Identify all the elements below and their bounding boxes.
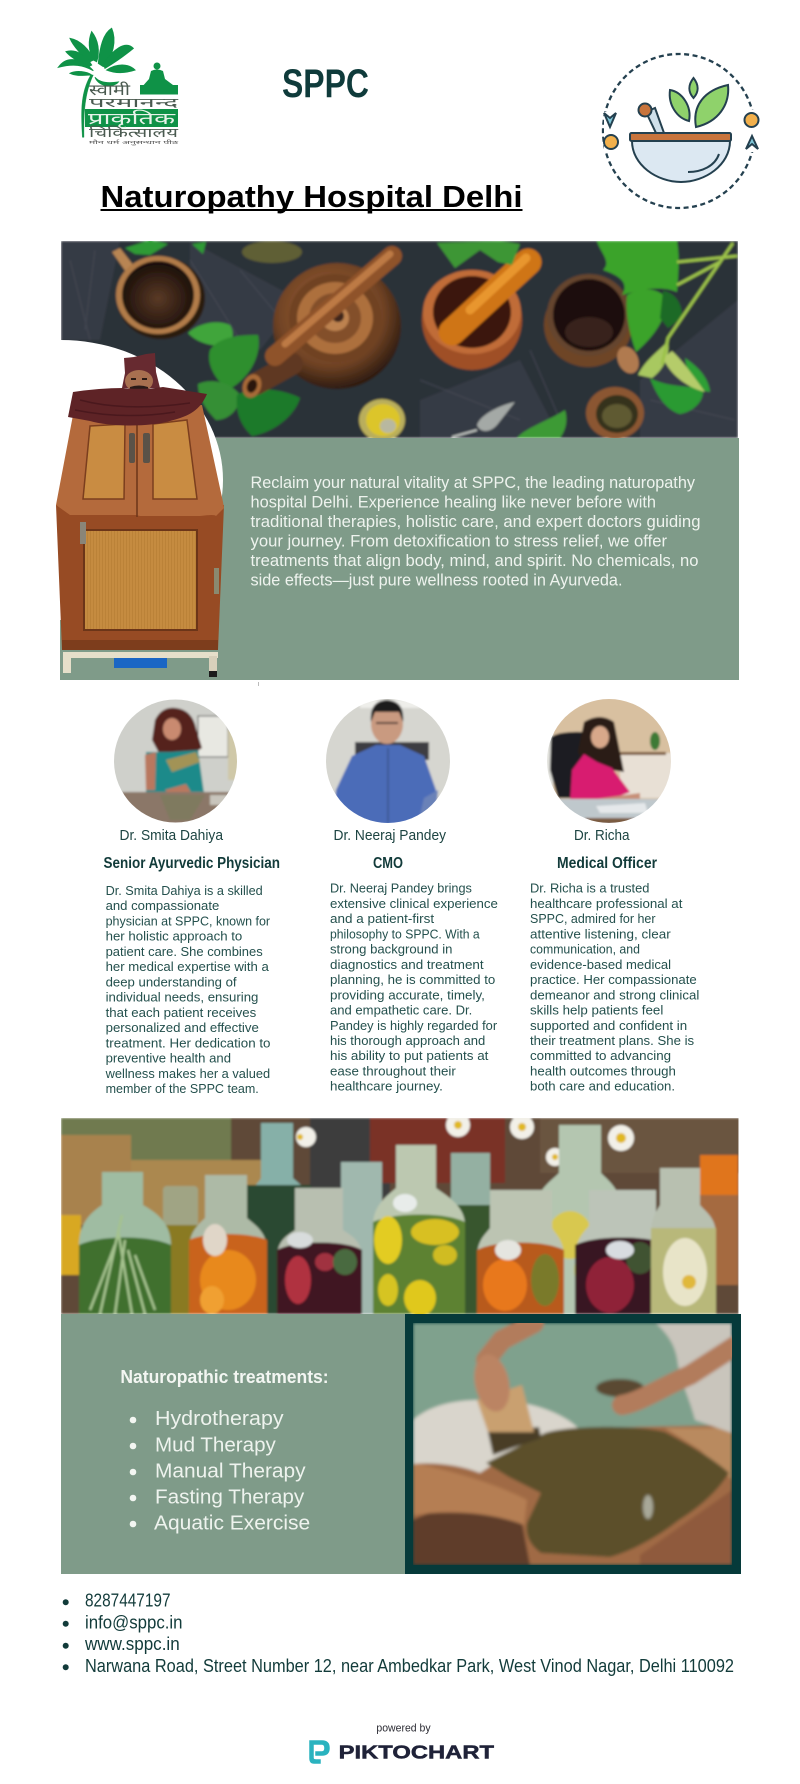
treatments list: Aquatic Exercise [154,1513,310,1535]
doctor bio: Richa: communication, and [530,942,640,957]
doctor bio: Neeraj: and empathetic care. Dr. [330,1002,472,1018]
daisies [296,1113,634,1166]
doctor role: Richa: Medical Officer [557,855,657,872]
treatments list [130,1408,310,1535]
powered by Piktochart footer: PIKTOCHART [339,1741,495,1762]
doctor bio: Neeraj: extensive clinical experience [330,896,498,911]
doctor bio: Smita: patient care. She combines [106,944,263,959]
green nettle leaves centre [188,322,233,346]
mortar and pestle [420,311,524,372]
logo wordmark: परमानन्द [89,95,180,110]
treatments list: Fasting Therapy [155,1487,304,1509]
orange bottle [188,1174,266,1241]
doctor bio: Neeraj: planning, he is committed to [330,972,495,987]
doctor name: Neeraj: Dr. Neeraj Pandey [334,827,446,844]
powered by Piktochart footer [310,1723,495,1763]
doctor bio: Richa: healthcare professional at [530,896,683,911]
cabinet base, legs and tray [114,656,167,668]
doctor name: Richa: Dr. Richa [574,827,630,844]
doctor bio: Smita: deep understanding of [106,974,237,989]
intro paragraph: side effects—just pure wellness rooted in Ayurveda. [250,570,622,590]
brand name: SPPC [282,62,369,106]
doctor bio: Richa: attentive listening, clear [530,926,671,941]
doctor bio: Smita: her medical expertise with a [106,959,270,974]
contact list: info@sppc.in [85,1612,182,1632]
doctor bio: Richa: evidence-based medical [530,957,671,972]
doctor bio: Smita: physician at SPPC, known for [106,914,271,928]
panel: intro green background [60,438,739,680]
doctor bio: Neeraj: ease throughout their [330,1064,456,1078]
doctor bio: Neeraj [330,881,498,1094]
bottles backdrop [61,1118,739,1314]
panel: treatments [61,1314,405,1574]
logo wordmark: स्वामी [89,82,131,99]
icon: Piktochart P mark [310,1741,329,1763]
red petal bottle [276,1186,360,1251]
clay cup left [112,248,134,272]
doctor bio: Richa [530,881,699,1094]
treatments list: Manual Therapy [155,1460,306,1482]
doctor bio: Smita: preventive health and [106,1050,231,1066]
doctor bio: Richa: skills help patients feel [530,1002,663,1018]
cabinet lower body [56,505,224,650]
doctor bio: Richa: health outcomes through [530,1064,676,1078]
doctor photo: Dr. Richa [545,695,675,826]
treatments list: Mud Therapy [155,1434,276,1456]
doctor photo: Dr. Smita Dahiya [114,700,237,822]
doctor bio: Richa: Dr. Richa is a trusted [530,881,649,896]
doctor role: Smita: Senior Ayurvedic Physician [104,855,280,872]
contact list: 8287447197 [85,1591,170,1611]
maroon shawl [68,387,207,426]
photo frame: mud therapy [405,1314,741,1574]
intro paragraph [250,473,700,590]
back bottles [255,1121,302,1187]
crimson bottle [576,1188,658,1246]
clay cup right [542,310,632,368]
doctor bio: Smita: treatment. Her dedication to [106,1035,270,1050]
doctor bio: Neeraj: Pandey is highly regarded for [330,1018,498,1033]
doctor bio: Smita: Dr. Smita Dahiya is a skilled [106,883,263,898]
doctor bio: Neeraj: Dr. Neeraj Pandey brings [330,881,472,896]
photo: mud applied to back [413,1323,735,1565]
contact list [63,1591,734,1676]
doctor bio: Smita: member of the SPPC team. [106,1081,259,1096]
steam cabinet with patient [56,353,224,677]
logo wordmark: चिकित्सालय [89,125,179,140]
logo: Swami Parmanand Prakritik Chikitsalaya [58,28,180,146]
green stems [662,243,737,365]
doctor bio: Smita [105,883,271,1096]
photo: herbal oil bottles [61,1113,740,1316]
turban and face [122,353,160,395]
doctor role: Neeraj: CMO [373,855,403,872]
treatments heading: Naturopathic treatments: [120,1367,329,1387]
hero photo: herbs and clay pots on slate [61,240,738,441]
rosemary bottle [77,1170,173,1246]
spoon and bottom leaf [477,402,515,431]
contact list: Narwana Road, Street Number 12, near Ambedkar Park, West Vinod Nagar, Delhi 110092 [85,1656,734,1676]
intro paragraph: your journey. From detoxification to stress relief, we offer [250,532,667,550]
teapot [273,263,401,389]
gold strainer [359,399,405,441]
doctor bio: Neeraj: providing accurate, timely, [330,987,485,1002]
intro paragraph: treatments that align body, mind, and spirit. No chemicals, no [250,551,698,570]
doctor bio: Smita: and compassionate [106,898,219,913]
doctor bio: Neeraj: diagnostics and treatment [330,957,484,972]
doctor bio: Smita: personalized and effective [106,1020,259,1035]
intro paragraph: hospital Delhi. Experience healing like never before with [250,492,656,512]
doctor name: Smita: Dr. Smita Dahiya [120,827,224,844]
doctor bio: Smita: that each patient receives [106,1005,257,1020]
logo wordmark: प्राकृतिक [88,110,176,129]
intro paragraph: traditional therapies, holistic care, and expert doctors guiding [250,512,700,531]
doctor bio: Richa: demeanor and strong clinical [530,987,699,1002]
doctor bio: Smita: individual needs, ensuring [106,990,258,1005]
doctor bio: Neeraj: and a patient-first [330,911,434,926]
right nettle leaves [597,241,679,295]
doctor bio: Richa: both care and education. [530,1079,675,1094]
doctor bio: Neeraj: his ability to put patients at [330,1048,489,1063]
logo wordmark: मौन धर्म अनुसन्धान पीठ [89,139,178,146]
doctor bio: Neeraj: healthcare journey. [330,1079,443,1094]
doctor bio: Richa: committed to advancing [530,1048,671,1063]
doctor bio: Smita: wellness makes her a valued [105,1066,270,1081]
orange bottle two [476,1188,564,1252]
daisy bottle [655,1166,717,1230]
top leaves [437,241,520,268]
logo yoga figure [140,62,178,94]
doctor bio: Richa: supported and confident in [530,1018,687,1033]
doctor bio: Neeraj: philosophy to SPPC. With a [330,926,480,941]
herbs top [242,241,302,263]
doctor bio: Richa: practice. Her compassionate [530,972,697,987]
yellow flower bottle [373,1143,466,1224]
small clay pot [586,387,644,439]
intro paragraph: Reclaim your natural vitality at SPPC, the leading naturopathy [250,473,695,492]
logo tree [58,28,135,137]
white arch behind steam cabinet [0,340,223,620]
icon: mortar, pestle and herbs in a dashed cycle [603,54,758,208]
doctor photo: Dr. Neeraj Pandey [326,699,450,823]
powered by Piktochart footer: powered by [376,1723,431,1735]
treatments list: Hydrotherapy [155,1408,284,1430]
doctor bio: Neeraj: his thorough approach and [330,1033,485,1048]
doctor bio: Smita: her holistic approach to [106,929,242,944]
doctor bio: Richa: their treatment plans. She is [530,1033,695,1048]
logo wordmark [85,82,180,146]
cabinet upper doors [56,405,224,516]
doctor bio: Richa: SPPC, admired for her [530,911,656,926]
contact list: www.sppc.in [84,1634,180,1654]
doctor bio: Neeraj: strong background in [330,942,452,957]
title: Naturopathy Hospital Delhi [100,179,522,214]
